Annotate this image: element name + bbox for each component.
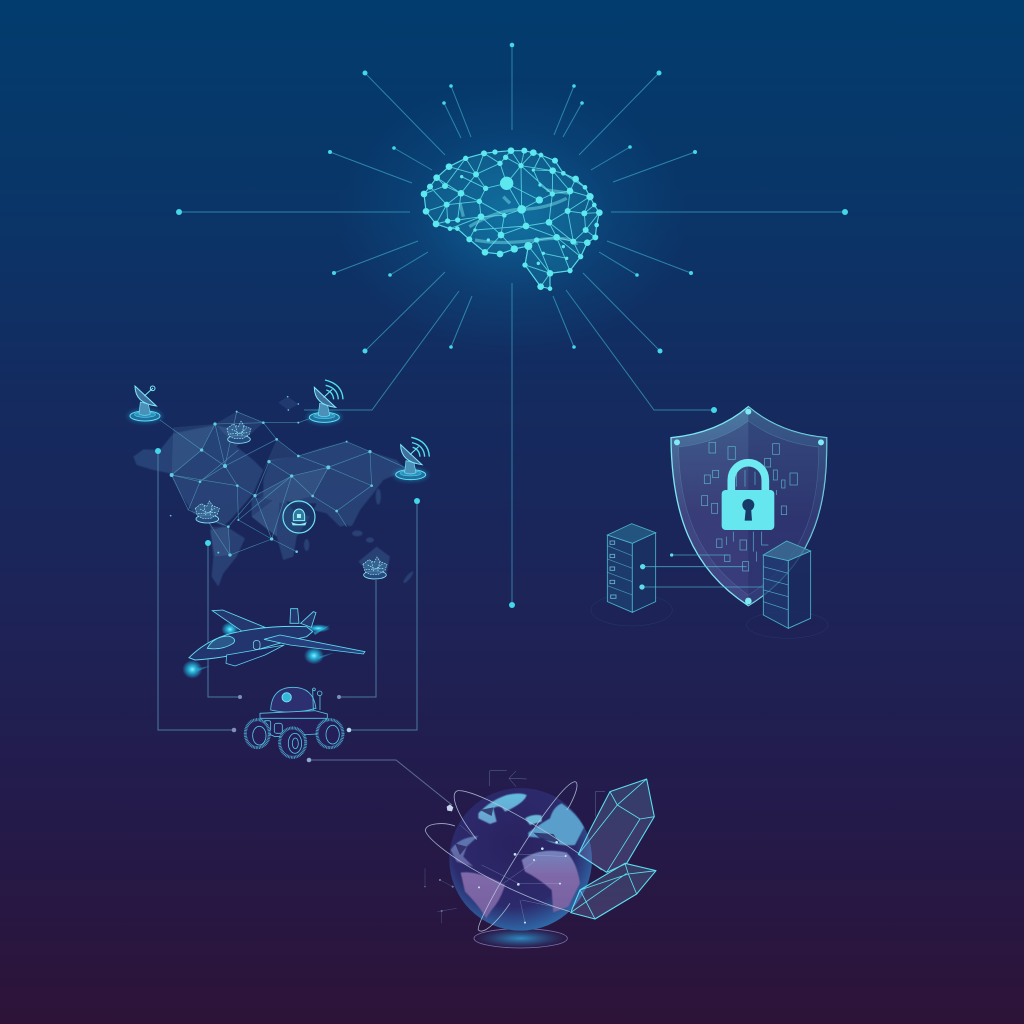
shield inner rim	[679, 421, 819, 595]
circuit connectors	[158, 451, 452, 805]
data file icons	[702, 442, 797, 571]
shield right shade	[748, 407, 827, 606]
globe dark patches	[455, 807, 560, 855]
map continents	[133, 425, 415, 587]
security shield group	[591, 407, 828, 638]
crystal cluster	[571, 779, 656, 919]
padlock	[722, 463, 774, 530]
radiating connector lines	[179, 45, 845, 605]
globe base platform	[474, 928, 567, 948]
brain glow	[337, 83, 687, 353]
pointer arrow marker	[424, 771, 605, 923]
tall crystal	[578, 779, 654, 872]
ray end nodes	[176, 43, 848, 608]
shield body	[671, 407, 827, 606]
server rack left	[591, 524, 672, 626]
server connector lines	[639, 553, 763, 590]
rover vehicle	[245, 687, 343, 757]
drone and rover group	[182, 609, 365, 757]
site robot top	[227, 421, 251, 443]
globe continents	[451, 793, 584, 918]
orbit rings	[425, 782, 602, 931]
world map network	[128, 380, 429, 587]
low crystal	[571, 863, 656, 919]
server rack right	[747, 541, 828, 638]
map network lines	[160, 412, 411, 555]
engine glows	[182, 622, 334, 679]
translucent map facets	[172, 412, 328, 557]
alert beacon badge	[283, 501, 315, 533]
satellite dish north	[307, 380, 343, 424]
globe network lines	[460, 825, 567, 924]
brain network icon	[421, 147, 603, 291]
small diamond node	[278, 397, 298, 410]
site robot southeast	[363, 557, 387, 579]
globe sphere	[449, 788, 592, 931]
satellite dish east	[393, 437, 429, 481]
globe and crystals group	[424, 771, 656, 948]
drone aircraft	[182, 609, 365, 679]
site robot west	[195, 501, 219, 523]
shield corner nodes	[674, 409, 824, 604]
satellite dish west	[128, 386, 162, 423]
circuit connector nodes	[155, 448, 420, 762]
